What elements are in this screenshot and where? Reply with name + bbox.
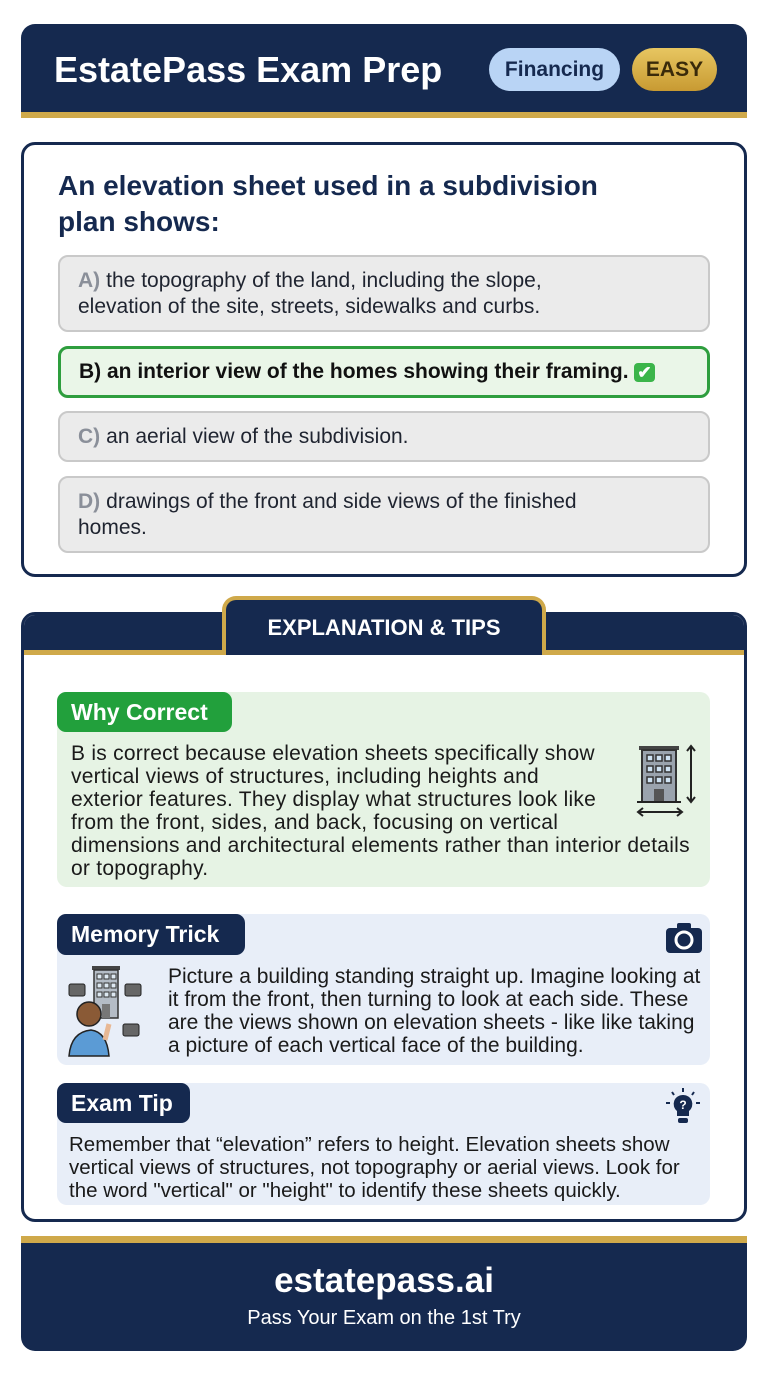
question card [21,142,747,577]
memory trick text: Picture a building standing straight up. Imagine looking at [168,965,700,988]
why correct text: dimensions and architectural elements rather than interior details [71,834,690,857]
exam tip box [57,1083,710,1205]
icon: building with arrows [636,744,696,817]
option B (correct) [58,346,710,398]
why correct text: from the front, sides, and back, focusing on vertical [71,811,558,834]
icon: lightbulb: ? [679,1098,687,1112]
label: Memory Trick [57,914,245,955]
why correct text: vertical views of structures, including heights and [71,765,539,788]
option D: homes. [78,516,147,538]
icon: lightbulb [666,1088,700,1123]
option C [58,411,710,462]
option C: C) an aerial view of the subdivision. [78,424,409,448]
explanation panel [21,612,747,1222]
memory trick text: it from the front, then turning to look at each side. These [168,988,688,1011]
exam tip text: the word "vertical" or "height" to identify these sheets quickly. [69,1179,621,1202]
option B (correct): B) an interior view of the homes showing their framing. ✔ [79,360,652,382]
memory trick text: a picture of each vertical face of the building. [168,1034,584,1057]
exam tip text: Remember that “elevation” refers to height. Elevation sheets show [69,1133,670,1156]
why correct text: exterior features. They display what structures look like [71,788,596,811]
illustration: person with building and cameras [68,966,142,1057]
memory trick box [57,914,710,1065]
why correct text: B is correct because elevation sheets specifically show [71,742,595,765]
tab: explanation heading [222,596,546,655]
pill: Financing: Financing [505,58,604,80]
option D [58,476,710,553]
why correct text: or topography. [71,857,208,880]
icon: camera [666,923,702,953]
option A [58,255,710,332]
label: Why Correct: Why Correct [71,698,208,724]
label: Why Correct [57,692,232,732]
question text: An elevation sheet used in a subdivision [58,170,598,201]
pill: Financing [489,48,620,91]
why correct text [71,742,690,880]
pill: EASY: EASY [646,58,703,80]
tab: explanation heading: EXPLANATION & TIPS [267,614,501,640]
option A: elevation of the site, streets, sidewalks and curbs. [78,294,540,318]
exam tip text [69,1133,680,1202]
title: EstatePass Exam Prep [54,49,442,90]
memory trick text [168,965,700,1057]
label: Exam Tip: Exam Tip [71,1090,173,1116]
label: Memory Trick: Memory Trick [71,921,219,947]
option A: A) the topography of the land, including the slope, [78,268,542,292]
header bar [21,24,747,118]
tagline: Pass Your Exam on the 1st Try [247,1307,521,1329]
pill: EASY [632,48,717,91]
memory trick text: are the views shown on elevation sheets - like like taking [168,1011,694,1034]
question text: plan shows: [58,206,220,237]
exam tip text: vertical views of structures, not topography or aerial views. Look for [69,1156,680,1179]
label: Exam Tip [57,1083,190,1123]
footer brand: estatepass.ai [274,1261,494,1300]
option D: D) drawings of the front and side views of the finished [78,490,577,512]
footer [21,1236,747,1351]
question text [58,170,598,237]
why correct box [57,692,710,887]
